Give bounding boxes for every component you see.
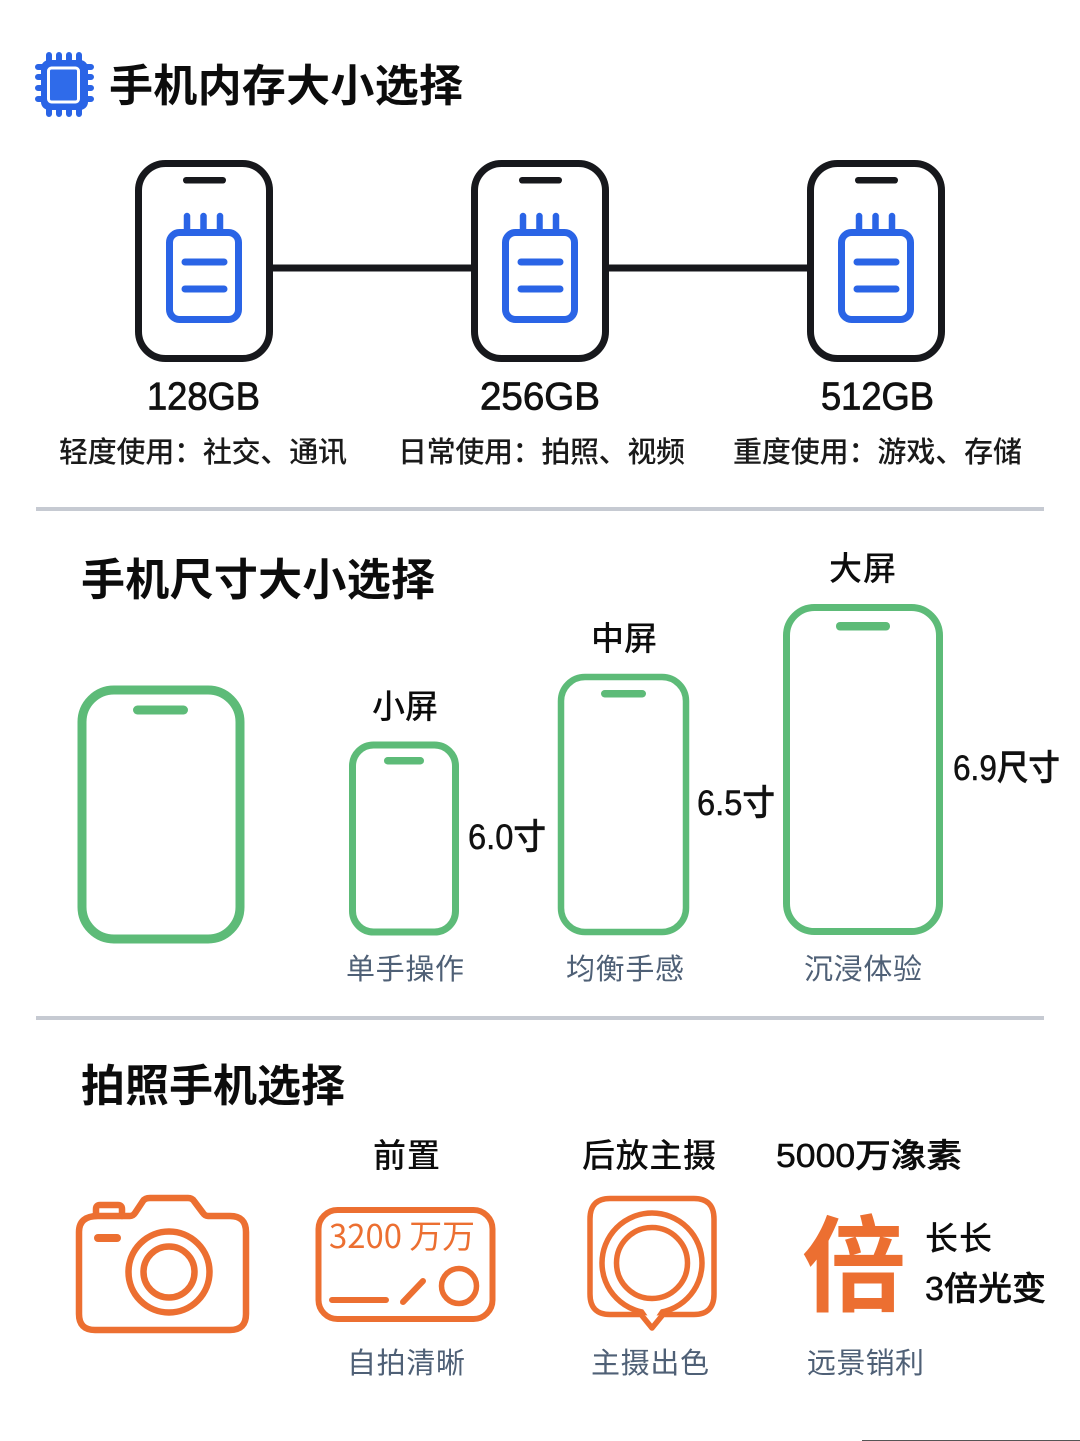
label: medium screen: 中屏 [591,612,657,660]
phone: 128GB [138,164,270,358]
caption: selfie: 自拍清晰 [347,1340,465,1382]
phone outline: reference [82,690,240,939]
label: 6.9 inch: 6.9尺寸 [953,749,1060,788]
heading: camera: 拍照手机选择 [81,1050,345,1114]
label: rear main camera: 后放主摄 [582,1129,716,1177]
label: 6.0 inch: 6.0寸 [468,818,546,857]
phone: 512GB [810,164,942,358]
phone outline: medium screen [561,677,686,932]
label: 256GB: 256GB [480,376,600,418]
icon: front camera card [318,1210,492,1319]
label: front camera: 前置 [373,1129,440,1177]
caption: balanced: 均衡手感 [566,946,684,988]
label: 128GB: 128GB [147,376,260,418]
label: 512GB: 512GB [821,376,934,418]
icon: 倍 zoom character: 倍 [802,1182,906,1333]
icon: camera [79,1198,246,1330]
phone: 256GB [474,164,606,358]
connector lines [272,264,808,272]
label: telephoto: 长长 [925,1212,992,1260]
label: small screen: 小屏 [372,680,438,728]
caption: main camera: 主摄出色 [591,1340,709,1382]
title: memory: 手机内存大小选择 [109,50,463,114]
text: light use: 轻度使用：社交、通讯 [59,429,347,471]
caption: one hand: 单手操作 [346,946,464,988]
caption: far view: 远景销利 [807,1340,924,1382]
icon: front camera card: 3200 万万 [329,1210,475,1258]
text: heavy use: 重度使用：游戏、存储 [733,429,1022,471]
label: 3x optical zoom: 3倍光变 [925,1270,1046,1307]
label: 50MP: 5000万潒素 [776,1137,962,1174]
label: large screen: 大屏 [829,542,896,590]
phone outline: small screen [352,745,456,932]
caption: immersive: 沉浸体验 [804,946,922,988]
icon: memory chip [38,55,91,114]
phone outline: large screen [786,608,940,932]
heading: screen size: 手机尺寸大小选择 [81,544,435,608]
icon: main camera [590,1198,714,1328]
text: daily use: 日常使用：拍照、视频 [398,429,685,471]
label: 6.5 inch: 6.5寸 [697,784,775,823]
